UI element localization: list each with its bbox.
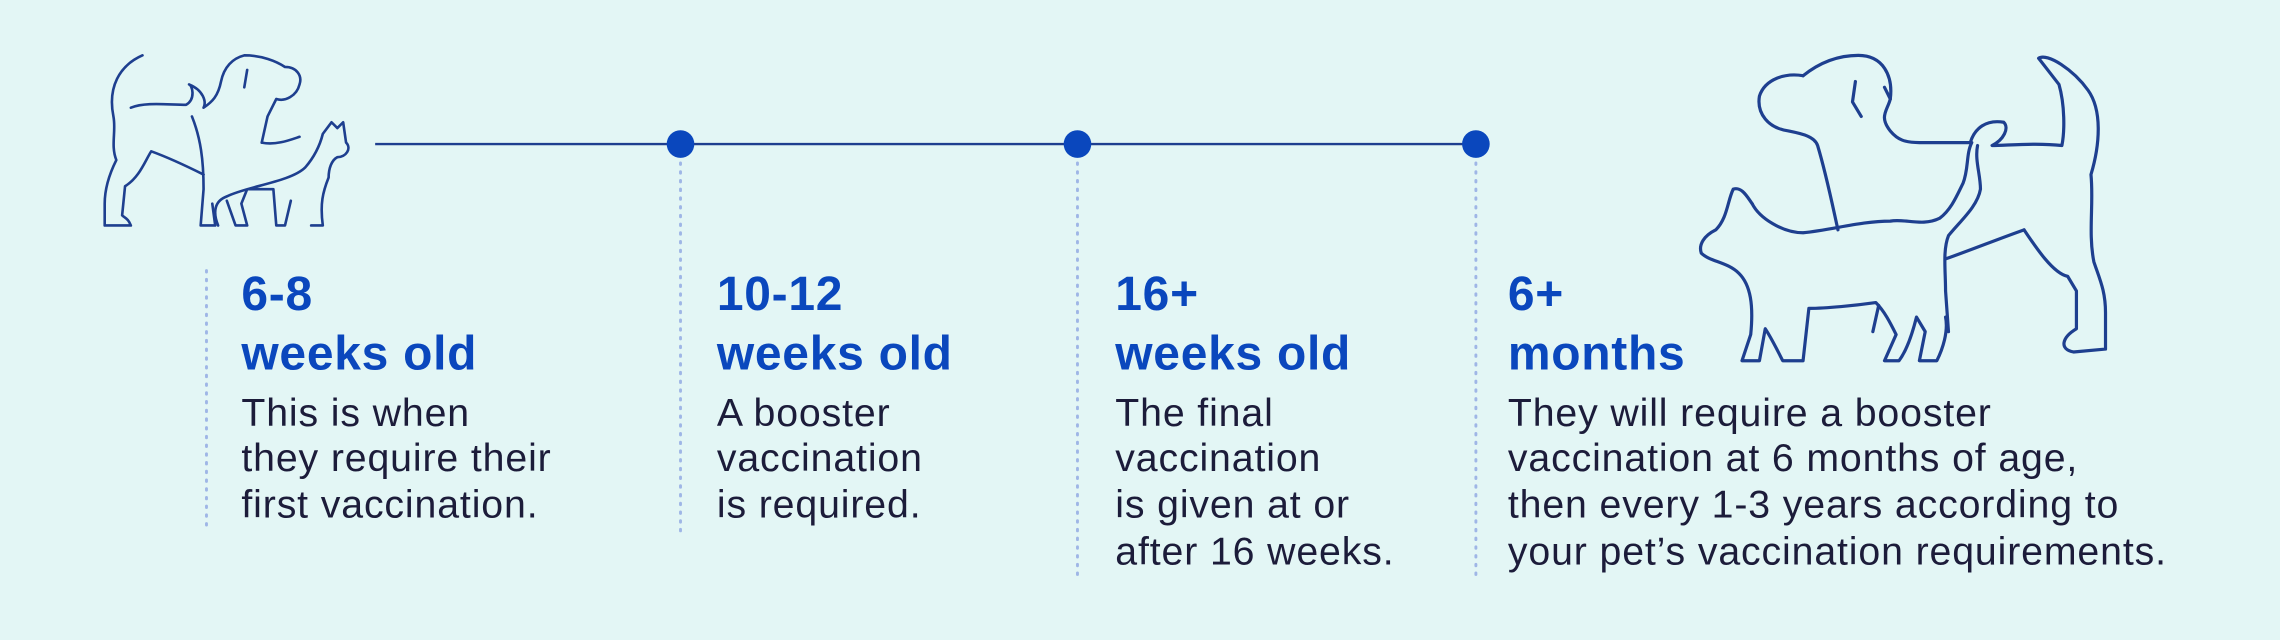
step 3: 16+ weeks: vaccination (1115, 436, 1321, 480)
step 4: 6+ months: your pet’s vaccination requirements. (1508, 529, 2167, 573)
step 4: 6+ months: They will require a booster (1508, 391, 1992, 435)
timeline line (375, 143, 1476, 145)
step 2: 10-12 weeks: weeks old (716, 327, 953, 380)
step 3: 16+ weeks: The final (1115, 391, 1274, 435)
timeline dots (667, 130, 1490, 158)
step 3: 16+ weeks: weeks old (1114, 327, 1351, 380)
step 4: 6+ months: vaccination at 6 months of age, (1508, 436, 2078, 480)
step 3: 16+ weeks: 16+ (1115, 268, 1199, 321)
step 3: 16+ weeks (1114, 268, 1395, 573)
step 2: 10-12 weeks (716, 268, 953, 527)
step 1: 6-8 weeks (240, 268, 552, 527)
step 3: 16+ weeks: is given at or (1115, 483, 1350, 527)
step 1: 6-8 weeks: they require their (241, 436, 552, 480)
step 3: 16+ weeks: after 16 weeks. (1115, 529, 1395, 573)
step 2: 10-12 weeks: vaccination (717, 436, 923, 480)
step 1: 6-8 weeks: weeks old (240, 327, 477, 380)
step 2: 10-12 weeks: 10-12 (717, 268, 843, 321)
step 4: 6+ months: months (1508, 327, 1685, 380)
step 4: 6+ months: 6+ (1508, 268, 1564, 321)
step 1: 6-8 weeks: 6-8 (241, 268, 313, 321)
icon: large dog and cat (1701, 55, 2106, 361)
step 1: 6-8 weeks: This is when (241, 391, 470, 435)
step 4: 6+ months (1508, 268, 2167, 573)
step 4: 6+ months: then every 1-3 years according to (1508, 483, 2119, 527)
step 1: 6-8 weeks: first vaccination. (241, 483, 538, 527)
step 2: 10-12 weeks: A booster (717, 391, 891, 435)
step 2: 10-12 weeks: is required. (717, 483, 922, 527)
icon: small dog and cat (105, 55, 348, 225)
